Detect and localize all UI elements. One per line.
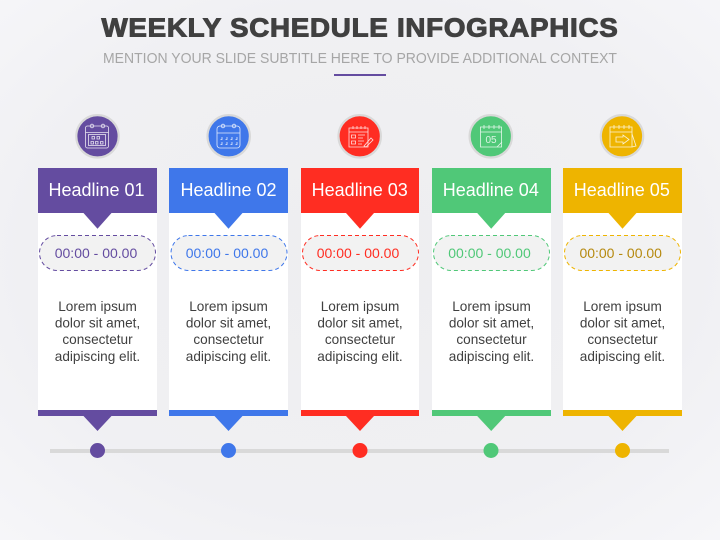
description: consectetur (456, 332, 527, 347)
footer bar and pointer (563, 410, 682, 431)
description: consectetur (193, 332, 264, 347)
icon: calendar dates (208, 115, 250, 158)
description: Lorem ipsum (58, 299, 137, 314)
headline: Headline 05 (574, 180, 670, 200)
description: dolor sit amet, (55, 316, 140, 330)
panel: column 03 (301, 115, 419, 458)
subtitle: MENTION YOUR SLIDE SUBTITLE HERE TO PROVIDE ADDITIONAL CONTEXT (103, 51, 617, 67)
card body (38, 213, 157, 410)
time pill (40, 236, 156, 270)
description: adipiscing elit. (580, 349, 665, 364)
description: dolor sit amet, (317, 316, 403, 330)
card body (301, 213, 419, 410)
time pill (171, 236, 287, 270)
timeline dot (615, 443, 630, 458)
card body (432, 213, 551, 410)
icon: calendar with arrow (601, 115, 643, 158)
description: consectetur (587, 332, 658, 347)
header pointer (346, 213, 374, 229)
icon label: 05 (485, 135, 497, 146)
description: dolor sit amet, (580, 316, 665, 330)
description: adipiscing elit. (449, 349, 534, 364)
header pointer (608, 213, 636, 229)
time pill: 00:00 - 00.00 (448, 245, 531, 261)
time pill: 00:00 - 00.00 (55, 245, 137, 261)
footer bar and pointer (301, 410, 419, 431)
description: adipiscing elit. (55, 349, 140, 364)
footer bar and pointer (38, 410, 157, 431)
header band (563, 168, 682, 213)
footer bar and pointer (169, 410, 288, 431)
header band (169, 168, 288, 213)
timeline line (50, 449, 669, 453)
description: Lorem ipsum (189, 299, 268, 314)
panel: column 01 (38, 115, 157, 458)
time pill: 00:00 - 00.00 (579, 245, 662, 261)
panel: column 04 (432, 115, 551, 458)
title: WEEKLY SCHEDULE INFOGRAPHICS (102, 12, 618, 42)
header band (38, 168, 157, 213)
description: adipiscing elit. (317, 349, 403, 364)
description: Lorem ipsum (452, 299, 531, 314)
time pill (434, 236, 550, 270)
headline: Headline 01 (48, 180, 145, 200)
description: dolor sit amet, (186, 316, 271, 330)
time pill: 00:00 - 00.00 (186, 245, 268, 261)
timeline dot (484, 443, 498, 458)
panel: column 05 (563, 115, 682, 458)
time pill (302, 236, 418, 270)
headline: Headline 04 (443, 180, 539, 200)
description: dolor sit amet, (449, 316, 534, 330)
card body (169, 213, 288, 410)
icon: calendar checklist with pencil (338, 115, 381, 158)
icon: calendar grid (76, 115, 119, 158)
header band (432, 168, 551, 213)
icon: calendar day 05 (470, 115, 512, 158)
description: consectetur (325, 332, 396, 347)
description: Lorem ipsum (583, 299, 662, 314)
header pointer (214, 213, 242, 229)
timeline dot (352, 443, 368, 458)
header pointer (84, 213, 112, 229)
card body (563, 213, 682, 410)
footer bar and pointer (432, 410, 551, 431)
panel: column 02 (169, 115, 288, 458)
timeline dot (221, 443, 236, 458)
headline: Headline 03 (312, 180, 408, 200)
description: Lorem ipsum (321, 299, 399, 314)
headline: Headline 02 (180, 180, 277, 200)
time pill (564, 236, 680, 270)
time pill: 00:00 - 00.00 (317, 245, 399, 261)
header band (301, 168, 419, 213)
title underline accent (334, 74, 386, 76)
timeline dot (90, 443, 105, 458)
description: consectetur (62, 332, 133, 347)
description: adipiscing elit. (186, 349, 271, 364)
header pointer (477, 213, 505, 229)
